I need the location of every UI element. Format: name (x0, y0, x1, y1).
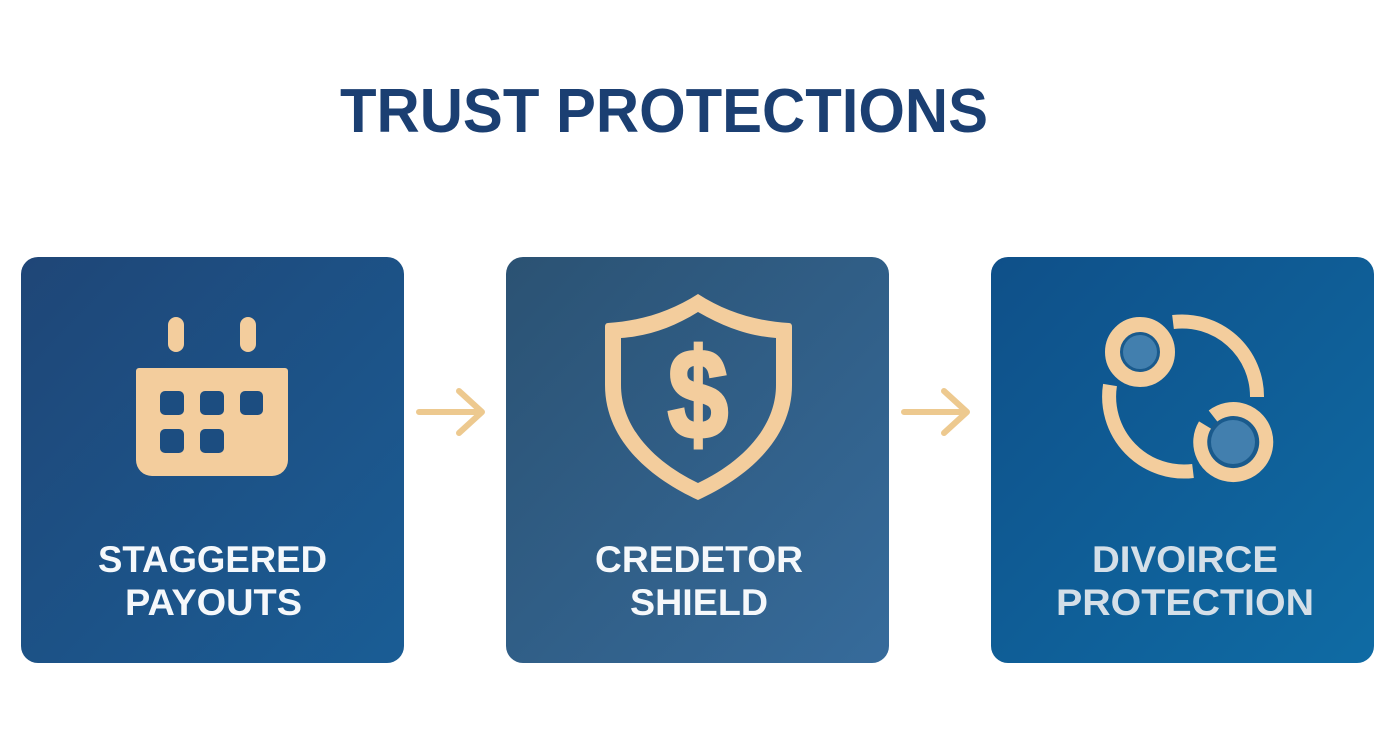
label: divorce protection (1056, 539, 1314, 623)
label: staggered payouts: PAYOUTS (125, 582, 302, 623)
panel: staggered payouts (21, 257, 404, 663)
panel: divorce protection (991, 257, 1374, 663)
label: staggered payouts: STAGGERED (98, 539, 327, 580)
title: TRUST PROTECTIONS (340, 77, 988, 146)
label: creditor shield (595, 539, 803, 623)
icon: shield with dollar (605, 294, 792, 500)
label: divorce protection: DIVOIRCE (1092, 539, 1278, 580)
panel: creditor shield (506, 257, 889, 663)
label: divorce protection: PROTECTION (1056, 582, 1314, 623)
arrow: first to second (419, 391, 482, 433)
arrow: second to third (904, 391, 967, 433)
label: creditor shield: CREDETOR (595, 539, 803, 580)
label: creditor shield: SHIELD (630, 582, 768, 623)
icon: shield with dollar: $ (668, 323, 728, 465)
label: staggered payouts (98, 539, 327, 623)
icon: calendar (136, 317, 288, 476)
icon: linked rings (1109, 321, 1266, 475)
